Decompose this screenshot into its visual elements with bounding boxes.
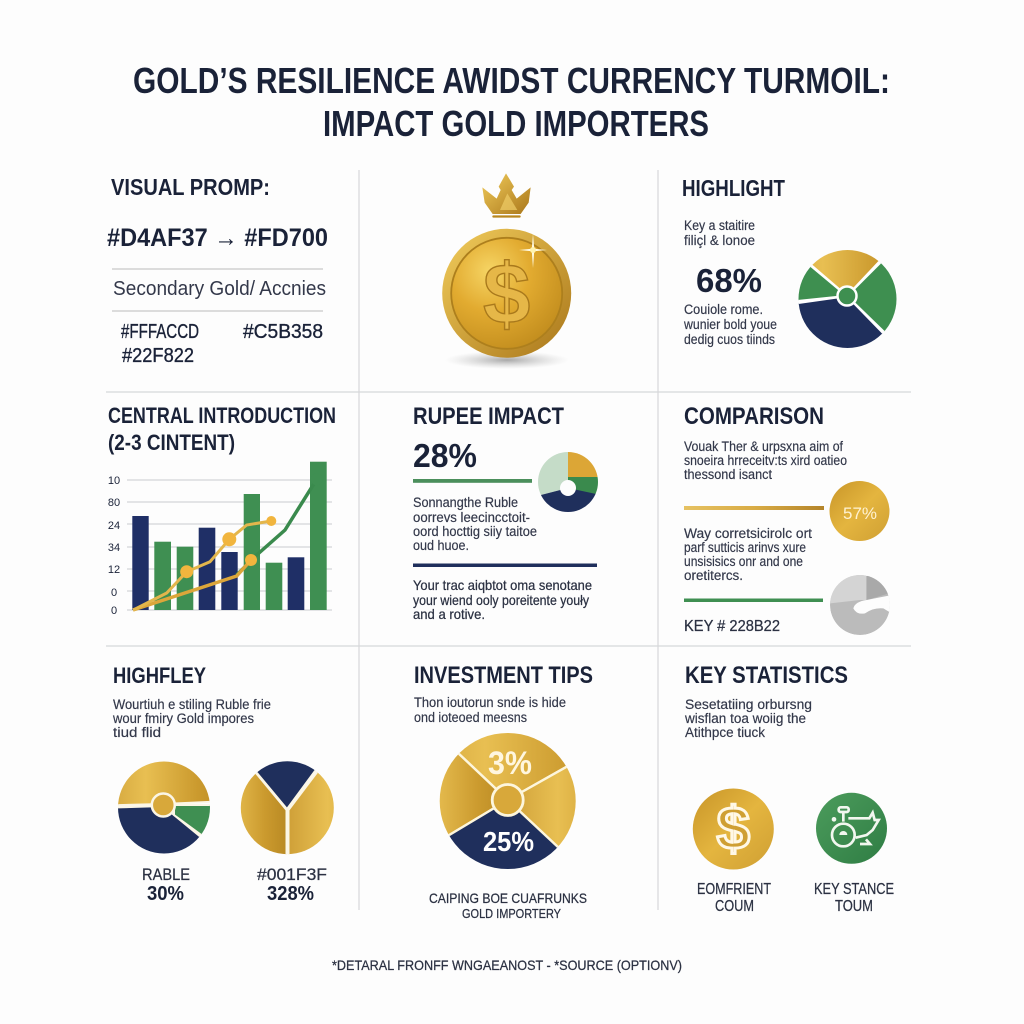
body text: oretitercs. <box>684 568 743 583</box>
icon: crown <box>482 173 531 218</box>
green rule <box>413 479 532 483</box>
body text: parf sutticis arinvs xure <box>684 540 806 555</box>
label: colour 328%: #001F3F <box>257 865 327 884</box>
bar and line chart: 80 <box>108 497 120 509</box>
stat 68%: 68% <box>696 262 762 299</box>
footer note: *DETARAL FRONFF WNGAEANOST - *SOURCE (OPTIONV) <box>332 957 682 973</box>
primary colour codes: #D4AF37 → #FD700 <box>107 224 328 252</box>
body text: oud huoe. <box>413 538 469 553</box>
intro text <box>684 439 847 482</box>
pie chart: tips <box>440 733 576 869</box>
bar and line chart <box>108 462 332 617</box>
title: GOLD’S RESILIENCE AWIDST CURRENCY TURMOIL: <box>133 60 890 101</box>
shadow <box>445 351 569 369</box>
icon: dollar coin <box>442 229 571 358</box>
secondary colour codes: #FFFACCD <box>121 321 199 343</box>
body text: Your trac aiqbtot oma senotane <box>413 577 592 593</box>
intro text: Key a staitire <box>684 218 755 233</box>
label: key stance toum: KEY STANCE <box>814 881 894 898</box>
intro text: Atithpce tiuck <box>685 725 765 740</box>
heading: central introduction: CENTRAL INTRODUCTION <box>108 403 336 428</box>
key label: KEY # 228B22 <box>684 618 780 635</box>
heading: key statistics: KEY STATISTICS <box>685 662 848 689</box>
label: rable 30% <box>142 865 190 905</box>
green bar <box>684 598 823 602</box>
panel: comparison <box>684 403 900 635</box>
panel: key statistics <box>684 662 894 915</box>
icon: sparkle <box>519 234 547 268</box>
body text <box>683 302 777 347</box>
intro text: ond ioteoed meesns <box>414 710 527 725</box>
intro text: wour fmiry Gold impores <box>112 711 254 726</box>
bar and line chart: 0 <box>111 605 117 617</box>
gold bar <box>684 506 824 510</box>
panel: visual prompt <box>107 174 328 367</box>
body text: oord hocttig siiy taitoe <box>413 524 537 539</box>
heading: highfley: HIGHFLEY <box>113 663 206 688</box>
intro text: tiud flid <box>113 725 161 740</box>
infographic canvas <box>106 68 911 974</box>
label: colour 328%: 328% <box>267 883 314 905</box>
bar and line chart: 34 <box>108 542 120 554</box>
bar and line chart: 24 <box>108 520 120 532</box>
label: rable 30%: 30% <box>147 883 184 905</box>
intro text: filiçl & lonoe <box>684 233 755 248</box>
icon: green tractor <box>816 793 887 864</box>
body text: unsisisics onr and one <box>684 554 803 569</box>
stat circle 57%: 57% <box>843 504 877 523</box>
intro text: wisflan toa woiig the <box>684 711 806 726</box>
panel: central introduction <box>108 403 336 617</box>
panel: rupee impact <box>413 403 610 622</box>
body text: and a rotive. <box>413 606 485 622</box>
label: rable 30%: RABLE <box>142 865 190 884</box>
bar and line chart: 10 <box>108 475 120 487</box>
heading: comparison: COMPARISON <box>684 403 824 430</box>
body text <box>684 526 812 583</box>
heading: highlight: HIGHLIGHT <box>682 175 785 201</box>
pie chart: tips: 3% <box>488 745 532 781</box>
stat 28%: 28% <box>413 437 477 474</box>
intro text <box>684 218 755 248</box>
donut chart: rupee <box>538 452 598 512</box>
pie chart: highlight <box>798 250 896 348</box>
panel: investment tips <box>414 666 592 918</box>
intro text: Wourtiuh e stiling Ruble frie <box>113 697 271 712</box>
label: eomfrient coum: COUM <box>715 898 754 915</box>
title <box>133 60 890 144</box>
bar and line chart: 12 <box>108 564 120 576</box>
body text <box>413 577 592 622</box>
secondary colour codes: #22F822 <box>122 345 194 367</box>
secondary label: Secondary Gold/ Accnies <box>113 278 326 300</box>
intro text: Thon ioutorun snde is hide <box>414 695 566 710</box>
body text: wunier bold youe <box>683 317 777 332</box>
pie chart: tips: 25% <box>483 826 534 857</box>
intro text: Vouak Ther & urpsxna aim of <box>684 439 843 454</box>
label: key stance toum <box>814 881 894 915</box>
intro text <box>112 697 271 740</box>
icon: gold dollar: $ <box>717 795 750 862</box>
body text: dedig cuos tiinds <box>684 332 775 347</box>
heading: visual prompt: VISUAL PROMP: <box>111 174 270 200</box>
stat circle 57% <box>830 481 890 541</box>
label: eomfrient coum: EOMFRIENT <box>697 881 771 898</box>
heading: investment tips: INVESTMENT TIPS <box>414 662 593 689</box>
intro text <box>684 697 812 740</box>
heading: rupee impact: RUPEE IMPACT <box>413 403 564 430</box>
secondary colour codes: #C5B358 <box>243 321 323 343</box>
body text: Couiole rome. <box>684 302 763 317</box>
label: colour 328% <box>257 865 327 905</box>
label: key stance toum: TOUM <box>835 898 873 915</box>
heading: central introduction <box>108 403 336 455</box>
pie chart: rable <box>118 762 210 854</box>
pie chart: y segments <box>240 761 334 854</box>
secondary colour codes <box>121 321 323 367</box>
icon: gold dollar <box>693 788 774 870</box>
intro text: thessond isanct <box>684 467 772 482</box>
label: eomfrient coum <box>697 881 771 915</box>
bar and line chart: 0 <box>111 587 117 599</box>
intro text: snoeira hrreceitv:ts xird oatieo <box>684 453 847 468</box>
body text: your wiend ooly poreitente youły <box>413 592 589 608</box>
caption: CAIPING BOE CUAFRUNKS <box>429 890 587 906</box>
heading: central introduction: (2-3 CINTENT) <box>108 430 235 455</box>
title: IMPACT GOLD IMPORTERS <box>323 103 709 144</box>
caption: GOLD IMPORTERY <box>462 906 561 921</box>
navy rule <box>413 564 597 567</box>
caption <box>429 890 587 921</box>
grey donut chart <box>830 575 890 635</box>
body text: Way corretsicirolc ort <box>684 526 812 541</box>
icon: dollar coin: $ <box>483 247 530 342</box>
intro text: Sesetatiing orbursng <box>685 697 812 712</box>
panel: gold coin <box>442 173 571 369</box>
body text: Sonnangthe Ruble <box>413 495 518 510</box>
panel: highlight <box>683 180 896 348</box>
intro text <box>414 695 566 725</box>
body text: oorrevs leecincctoit- <box>413 510 530 525</box>
body text <box>413 495 537 553</box>
panel: highfley <box>112 668 334 900</box>
